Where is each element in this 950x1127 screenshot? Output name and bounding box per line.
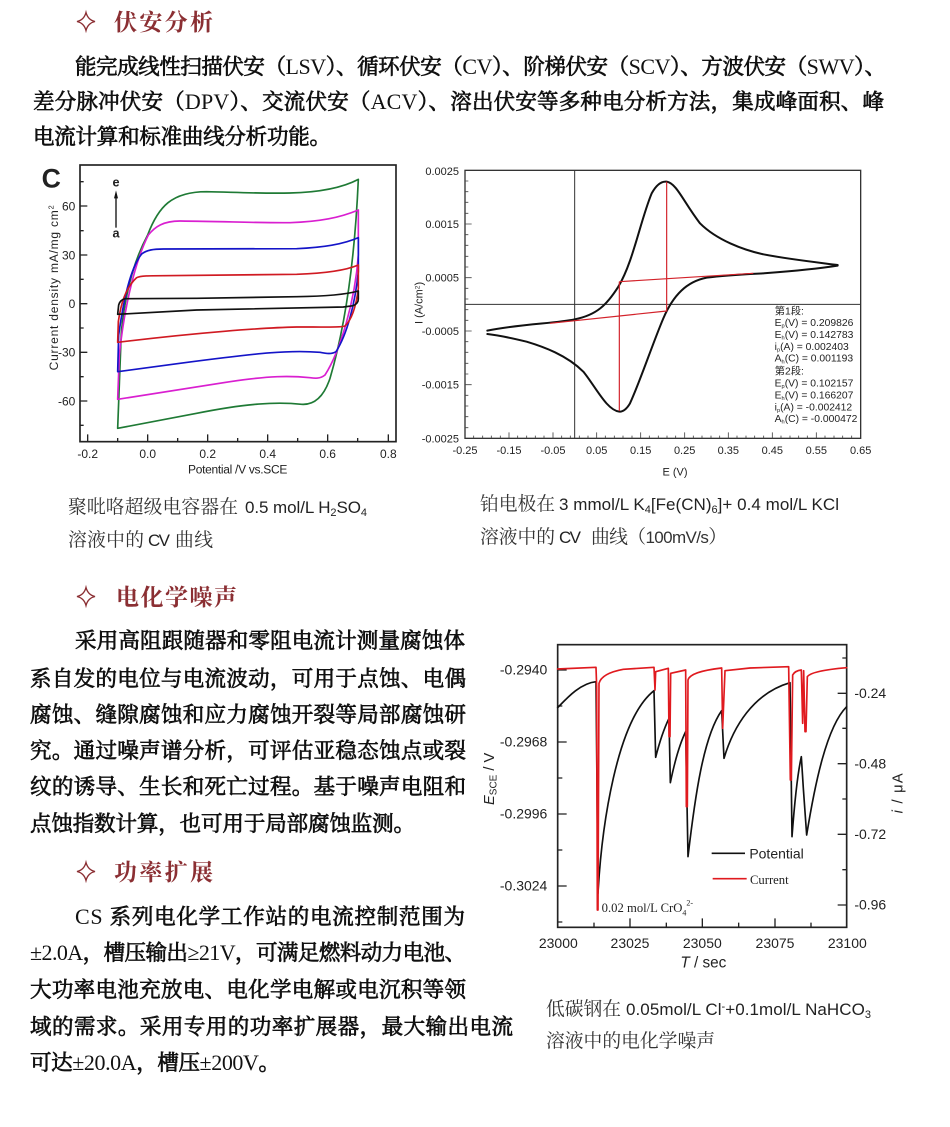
annotation: peak data: 第1段:	[775, 304, 804, 317]
caption: noise chart: 溶液中的电化学噪声	[546, 1030, 715, 1052]
caption: polypyrrole chart: 0.5 mol/L H	[245, 498, 331, 517]
curve: magenta	[118, 210, 358, 399]
caption: noise chart: 低碳钢在	[546, 998, 621, 1020]
annotation: chromate concentration: 4	[682, 908, 686, 917]
annotation: peak data: p	[777, 348, 780, 354]
axis labels: -0.0025	[422, 433, 459, 445]
label: panel letter: C	[42, 163, 61, 193]
text block: power expansion description: 域的需求。采用专用的功率扩展器，最大输出电流	[30, 1015, 513, 1040]
icon: diamond bullet	[77, 588, 95, 606]
caption: polypyrrole chart: 溶液中的	[68, 529, 144, 551]
axis labels: I (A/cm	[414, 289, 426, 324]
caption: polypyrrole chart: 聚吡咯超级电容器在	[68, 496, 238, 518]
annotation: peak data: (V) = 0.209826	[785, 318, 854, 329]
text block: electrochemical noise description: 腐蚀、缝隙腐蚀和应力腐蚀开裂等局部腐蚀研	[30, 703, 466, 727]
caption: platinum electrode chart: [Fe(CN)	[651, 495, 712, 514]
annotation: peak data: i	[775, 402, 777, 413]
annotation: arrow a to e: e	[112, 175, 120, 189]
axis labels: E	[482, 795, 498, 805]
axis labels: -0.48	[854, 755, 886, 771]
curve: black	[118, 291, 358, 314]
caption: noise chart: +0.1mol/L NaHCO	[725, 1000, 865, 1019]
annotation: peak data: (V) = 0.142783	[785, 330, 854, 341]
curve: peak baselines	[550, 182, 753, 411]
caption: noise chart: -	[722, 1001, 726, 1013]
caption: polypyrrole chart: 2	[330, 507, 337, 519]
axis labels: -0.2940	[500, 662, 548, 678]
axis labels: -0.3024	[500, 878, 548, 894]
annotation: peak data: A	[775, 414, 782, 425]
text block: voltammetry description: 电流计算和标准曲线分析功能。	[33, 125, 331, 149]
axis labels: 0.0015	[425, 219, 459, 231]
axis labels: 0.35	[718, 445, 739, 457]
text block: power expansion description: 可达±20.0A，槽压±200V。	[30, 1050, 280, 1076]
legend: Current	[750, 873, 789, 887]
axis labels: 0.8	[380, 447, 397, 461]
icon: diamond bullet	[77, 862, 95, 880]
caption: noise chart	[546, 998, 871, 1052]
axis labels: -0.2	[77, 447, 98, 461]
caption: polypyrrole chart	[68, 496, 367, 551]
text block: voltammetry description	[33, 54, 886, 149]
caption: polypyrrole chart: 4	[361, 507, 367, 519]
curve: voltammogram	[487, 182, 838, 412]
text block: electrochemical noise description: 究。通过噪声谱分析，可评估亚稳态蚀点或裂	[30, 739, 466, 764]
axis labels: -0.72	[854, 826, 886, 842]
text block: power expansion description: ±2.0A，槽压输出≥21V，可满足燃料动力电池、	[30, 940, 466, 966]
text block: electrochemical noise description: 采用高阻跟随器和零阻电流计测量腐蚀体	[75, 629, 465, 653]
curve: potential	[558, 682, 847, 893]
axis labels: 30	[62, 248, 76, 262]
caption: platinum electrode chart: 曲线（100mV/s）	[591, 526, 727, 548]
heading: 伏安分析: 伏安分析	[114, 10, 213, 35]
axis labels: i / μA	[891, 773, 907, 813]
annotation: chromate concentration: 2-	[686, 898, 693, 907]
axis labels: 0.15	[630, 445, 651, 457]
annotation: peak data: E	[775, 390, 782, 401]
axis labels: 0.0005	[425, 273, 459, 285]
annotation: peak data: (V) = 0.102157	[785, 378, 854, 389]
text block: electrochemical noise description: 纹的诱导、生长和死亡过程。基于噪声电阻和	[30, 775, 466, 799]
caption: noise chart: 3	[865, 1009, 871, 1021]
caption: platinum electrode chart	[480, 492, 839, 548]
axis labels: 0.45	[762, 445, 783, 457]
axis labels: 0.2	[199, 447, 216, 461]
chart: platinum electrode CV curve	[414, 166, 871, 478]
axis labels: -30	[58, 346, 76, 360]
axis labels: / V	[482, 752, 498, 775]
icon: diamond bullet	[77, 12, 95, 30]
annotation: peak data	[775, 304, 858, 426]
caption: platinum electrode chart: ]+ 0.4 mol/L KCl	[718, 495, 839, 514]
axis labels: 2	[46, 205, 55, 209]
caption: platinum electrode chart: 3 mmol/L K	[559, 495, 645, 514]
axis labels: 0.55	[806, 445, 827, 457]
annotation: peak data: (A) = -0.002412	[780, 402, 852, 413]
axis labels: Potential /V vs.SCE	[188, 462, 287, 476]
axis labels: 60	[62, 199, 76, 213]
heading: 电化学噪声: 电化学噪声	[116, 585, 237, 610]
axis labels: 23025	[611, 935, 650, 951]
text block: power expansion description: 大功率电池充放电、电化学电解或电沉积等领	[30, 978, 466, 1002]
annotation: peak data: E	[775, 330, 782, 341]
caption: polypyrrole chart: 曲线	[175, 529, 213, 551]
annotation: peak data: p	[782, 324, 785, 330]
axis labels: 0	[69, 297, 76, 311]
axis labels: -0.2996	[500, 806, 548, 822]
caption: polypyrrole chart: SO	[336, 498, 361, 517]
annotation: peak data: h	[782, 396, 785, 402]
curve: red	[118, 265, 358, 342]
axis labels: E (V)	[662, 466, 688, 478]
axis labels: -0.25	[452, 445, 478, 457]
legend: Potential	[749, 846, 804, 862]
caption: polypyrrole chart: CV	[148, 531, 171, 550]
annotation: arrow a to e: a	[112, 227, 120, 241]
axis labels: Current density mA/mg cm	[47, 210, 61, 370]
axis labels: 23000	[539, 935, 578, 951]
axis labels	[414, 166, 871, 478]
axis labels: -0.2968	[500, 734, 548, 750]
annotation: peak data: (C) = 0.001193	[785, 354, 853, 365]
caption: platinum electrode chart: 铂电极在	[480, 492, 555, 515]
caption: platinum electrode chart: CV	[559, 528, 582, 547]
axis labels	[46, 199, 397, 476]
annotation: chromate concentration: 0.02 mol/L CrO	[602, 901, 682, 915]
heading: 功率扩展: 功率扩展	[114, 860, 213, 885]
axis labels: -0.15	[496, 445, 522, 457]
legend	[712, 846, 804, 887]
annotation: peak data: i	[775, 342, 777, 353]
text block: voltammetry description: 差分脉冲伏安（DPV）、交流伏安（ACV）、溶出伏安等多种电分析方法，集成峰面积、峰	[33, 89, 884, 115]
axis labels: 23075	[756, 935, 795, 951]
curve: green	[118, 179, 358, 428]
axis labels: -0.0005	[422, 326, 459, 338]
axis labels: 0.0	[139, 447, 156, 461]
annotation: peak data: A	[775, 354, 782, 365]
axis labels: 23050	[683, 935, 722, 951]
text block: electrochemical noise description: 点蚀指数计算，也可用于局部腐蚀监测。	[30, 812, 415, 837]
annotation: peak data: p	[777, 408, 780, 414]
caption: platinum electrode chart: 6	[712, 504, 718, 516]
axis labels: 2	[414, 285, 421, 289]
annotation: peak data: E	[775, 378, 782, 389]
axis labels: -0.96	[854, 897, 886, 913]
annotation: peak data: (A) = 0.002403	[780, 342, 849, 353]
text block: power expansion description	[30, 904, 513, 1076]
annotation: peak data: h	[782, 336, 785, 342]
annotation: peak data: E	[775, 318, 782, 329]
axis labels: -60	[58, 394, 76, 408]
text block: voltammetry description: 能完成线性扫描伏安（LSV）、循环伏安（CV）、阶梯伏安（SCV）、方波伏安（SWV）、	[75, 54, 886, 79]
axis labels: -0.05	[540, 445, 566, 457]
axis labels: SCE	[489, 774, 500, 795]
axis labels: 0.25	[674, 445, 695, 457]
axis labels	[482, 662, 907, 972]
axis labels: T / sec	[680, 955, 727, 972]
axis labels: 0.0025	[425, 166, 459, 178]
text block: electrochemical noise description: 系自发的电位与电流波动，可用于点蚀、电偶	[30, 667, 466, 692]
annotation: peak data: (V) = 0.166207	[785, 390, 854, 401]
annotation: peak data: (C) = -0.000472	[785, 414, 858, 425]
caption: noise chart: 0.05mol/L Cl	[626, 1000, 721, 1019]
axis labels: 0.65	[850, 445, 871, 457]
axis labels: -0.0015	[422, 380, 459, 392]
annotation: peak data: p	[782, 384, 785, 390]
annotation: peak data: h	[782, 359, 785, 365]
axis labels: 0.4	[259, 447, 276, 461]
chart: polypyrrole supercapacitor CV curves	[42, 163, 397, 476]
curve: blue	[118, 238, 358, 372]
annotation: peak data: 第2段:	[775, 364, 804, 377]
caption: platinum electrode chart: 溶液中的	[480, 526, 555, 548]
axis labels: 0.05	[586, 445, 607, 457]
axis labels: )	[414, 282, 426, 285]
annotation: arrow a to e	[112, 175, 120, 241]
curve: current	[558, 667, 847, 910]
chart: electrochemical noise	[482, 645, 907, 972]
axis labels: 0.6	[319, 447, 336, 461]
axis labels: -0.24	[854, 685, 886, 701]
caption: platinum electrode chart: 4	[645, 504, 651, 516]
annotation: peak data: h	[782, 420, 785, 426]
text block: electrochemical noise description	[30, 629, 466, 837]
axis labels: 23100	[828, 935, 867, 951]
text block: power expansion description: CS 系列电化学工作站的电流控制范围为	[75, 904, 465, 929]
